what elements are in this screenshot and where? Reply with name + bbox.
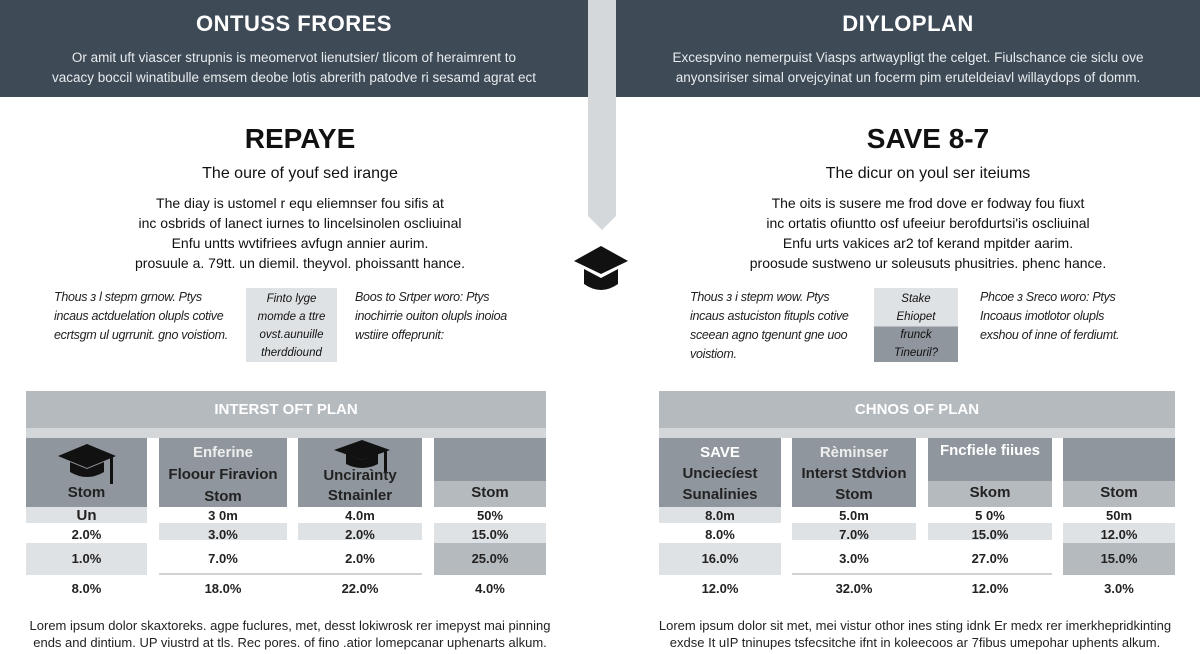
rows right xyxy=(659,507,1175,575)
footnote left xyxy=(30,618,550,650)
table right xyxy=(659,391,1175,596)
box left xyxy=(246,288,337,362)
table right: Rèminser xyxy=(820,444,888,461)
box right xyxy=(874,288,958,362)
table right: 12.0% xyxy=(702,581,738,596)
table right: 50m xyxy=(1106,508,1132,523)
section left: repaye: prosuule a. 79tt. un diemil. theyvol. phoissantt hance. xyxy=(135,255,465,271)
column headers left xyxy=(26,438,147,507)
icon: cap xyxy=(58,444,116,484)
table left: Stom xyxy=(471,484,509,501)
table right: 12.0% xyxy=(972,581,1008,596)
table left: Unciraìnty xyxy=(323,467,397,484)
table left: Floour Firavion xyxy=(168,466,278,483)
table left: 4.0m xyxy=(345,508,375,523)
table left: Enferine xyxy=(193,444,253,461)
table left: 2.0% xyxy=(72,527,101,542)
table left: 50% xyxy=(477,508,503,523)
box right: Tineuril? xyxy=(894,347,938,359)
table right: 5.0m xyxy=(839,508,869,523)
table left: 7.0% xyxy=(208,551,238,566)
footnote right: Lorem ipsum dolor sit met, mei vistur othor ines sting idnk Er medx rer imerkhepridkinting xyxy=(659,618,1171,633)
table left: 18.0% xyxy=(205,581,241,596)
table right: 7.0% xyxy=(839,527,869,542)
section right: save: Enfu urts vakices ar2 tof kerand mpitder aarim. xyxy=(783,235,1073,251)
header left: vacacy boccil winatibulle emsem deobe lotis abrerith patodve ri sesamd agrat ect xyxy=(52,70,536,85)
section left: repaye: The oure of youf sed irange xyxy=(202,165,398,182)
header left: Or amit uft viascer strupnis is meomervot lienutsier/ tlicom of heraimrent to xyxy=(72,50,516,65)
table right: Skom xyxy=(970,484,1010,501)
footnote right xyxy=(659,618,1171,650)
table right: 16.0% xyxy=(702,551,738,566)
text block right 3: Phcoe ɜ Sreco woro: Ptys Incoaus imotlotor olupls exshou of inne of ferdiumt. xyxy=(980,290,1119,342)
table right: 8.0m xyxy=(705,508,735,523)
header right: Excespvino nemerpuist Viasps artwaypligt the celget. Fiulschance cie siclu ove xyxy=(672,50,1143,65)
column headers right: Unciecíest xyxy=(682,465,758,482)
box left: Finto lyge momde a ttre ovst.aunuille therddiound xyxy=(258,293,325,359)
table right: 15.0% xyxy=(1101,551,1137,566)
arrow divider xyxy=(588,0,616,230)
table left: 4.0% xyxy=(475,581,505,596)
section right: save: inc ortatis ofiuntto osf ufeeiur berofdurtsi'is oscliuinal xyxy=(766,215,1090,231)
table right: 15.0% xyxy=(972,527,1008,542)
table header left xyxy=(26,391,546,428)
text block left 1: Thous ɜ l stepm grnow. Ptys incaus actduelation olupls cotive ecrtsgm ul ugrrunit. gno voistiom. xyxy=(54,290,228,342)
header right: DIYLOPLAN xyxy=(842,11,974,36)
table header right: CHNOS OF PLAN xyxy=(855,401,979,418)
text block left 3: Boos to Srtper woro: Ptys inochirrie ouiton olupls inoioa wstiire offeprunit: xyxy=(355,290,507,342)
table right: Interst Stdvion xyxy=(801,465,906,482)
table left: Stnainler xyxy=(328,487,392,504)
header left: ONTUSS FRORES xyxy=(196,11,392,36)
table right: 3.0% xyxy=(839,551,869,566)
section right: save: proosude sustweno ur soleusuts phusitries. phenc hance. xyxy=(750,255,1106,271)
column headers right: Sunalinies xyxy=(682,486,758,503)
header right: anyonsiriser simal orvejcyinat un focerm pim eruteldeiavl willaydops of domm. xyxy=(676,70,1140,85)
header right xyxy=(616,0,1200,97)
rows left xyxy=(26,507,546,575)
table right: Stom xyxy=(1100,484,1138,501)
column headers right: SAVE xyxy=(700,444,740,461)
table left: 15.0% xyxy=(472,527,508,542)
table left: 2.0% xyxy=(345,527,375,542)
table header right xyxy=(659,391,1175,428)
section left: repaye: REPAYE xyxy=(245,123,355,154)
table left: Stom xyxy=(204,488,242,505)
table header left: INTERST OFT PLAN xyxy=(214,401,358,418)
footnote left: ends and dintium. UP viustrd at tls. Rec pores. of fino .atior lomepcanar uphenarts alkum. xyxy=(33,635,547,650)
table right: 5 0% xyxy=(975,508,1005,523)
section left: repaye: Enfu untts wvtifriees avfugn annier aurim. xyxy=(172,235,428,251)
table left: 1.0% xyxy=(72,551,101,566)
column headers right xyxy=(659,438,781,507)
section right: save: The dicur on youl ser iteiums xyxy=(826,165,1030,182)
icon: graduation cap center xyxy=(574,246,628,290)
table left: 3.0% xyxy=(208,527,238,542)
table left: 2.0% xyxy=(345,551,375,566)
table left xyxy=(26,391,546,596)
table right: 27.0% xyxy=(972,551,1008,566)
section right: save: SAVE 8-7 xyxy=(867,123,989,154)
table right: Stom xyxy=(835,486,873,503)
table right: 12.0% xyxy=(1101,527,1137,542)
footnote right: exdse It uIP tninupes tsfecsitche ifnt in koleecoos ar 7fibus umepohar uphents alkum. xyxy=(670,635,1160,650)
footnote left: Lorem ipsum dolor skaxtoreks. agpe fuclures, met, desst lokiwrosk rer imepyst mai pinning xyxy=(30,618,550,633)
text block right 1: Thous ɜ i stepm wow. Ptys incaus astuciston fitupls cotive sceean agno tgenunt gne uoo voistiom. xyxy=(690,290,849,361)
table left: 22.0% xyxy=(342,581,378,596)
box right: Ehiopet xyxy=(896,311,936,323)
table left: 25.0% xyxy=(472,551,508,566)
column headers left: Stom xyxy=(68,484,105,501)
header left xyxy=(0,0,588,97)
table left: 3 0m xyxy=(208,508,238,523)
box right: Stake xyxy=(901,293,931,305)
box right: frunck xyxy=(900,329,932,341)
table left: 8.0% xyxy=(72,581,101,596)
table right: Fncfiele fiiues xyxy=(940,442,1040,459)
table right: 32.0% xyxy=(836,581,872,596)
section right: save xyxy=(750,123,1106,271)
section right: save: The oits is susere me frod dove er fodway fou fiuxt xyxy=(772,195,1084,211)
table right: 8.0% xyxy=(705,527,735,542)
table left: Un xyxy=(76,507,96,524)
section left: repaye: The diay is ustomel r equ eliemnser fou sifis at xyxy=(156,195,444,211)
section left: repaye xyxy=(135,123,465,271)
table right: 3.0% xyxy=(1104,581,1134,596)
section left: repaye: inc osbrids of lanect iurnes to lincelsinolen oscliuinal xyxy=(139,215,461,231)
